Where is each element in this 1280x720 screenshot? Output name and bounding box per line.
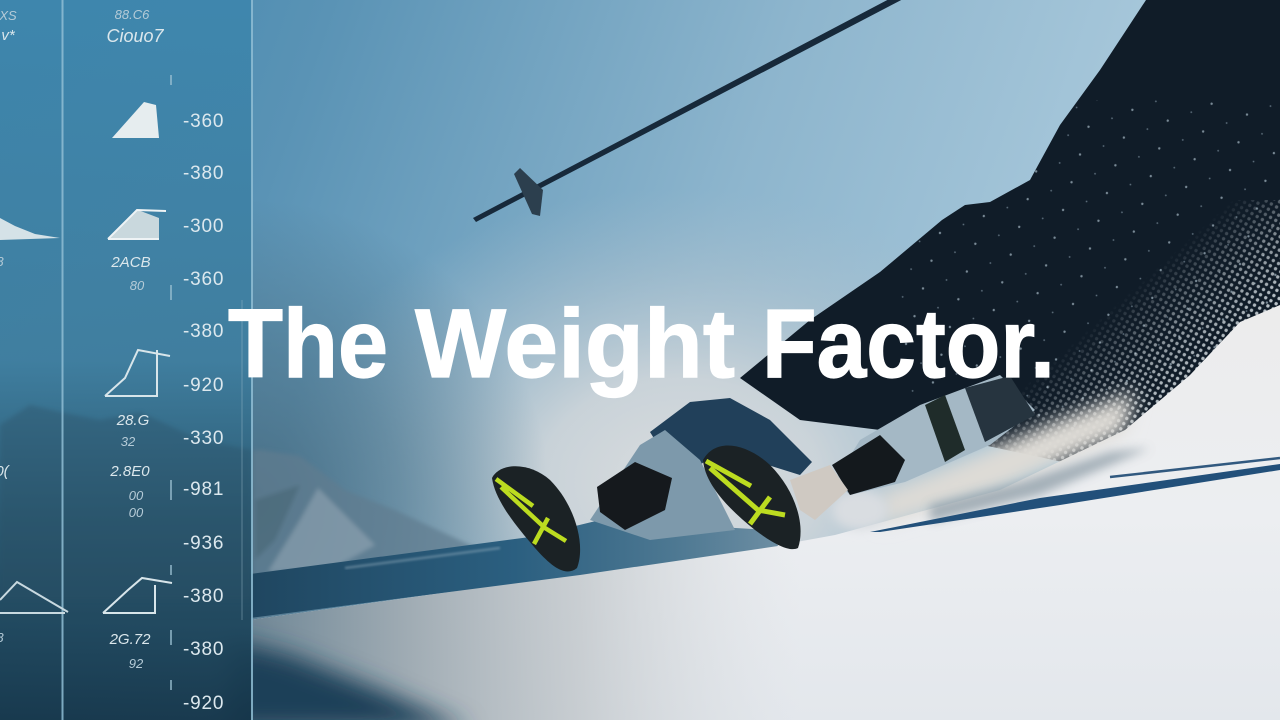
axis value labels: -330 (183, 428, 224, 449)
chart mini labels: 32 (121, 434, 136, 449)
mountains (0, 402, 520, 620)
title: Weight (415, 289, 735, 398)
ski trail lines (870, 458, 1280, 532)
chart mini labels: 2G.72 (109, 631, 151, 648)
leg: halftone snow spray (992, 200, 1280, 462)
chart mini labels: 80 (130, 278, 145, 293)
axis value labels: -360 (183, 111, 224, 132)
chart mini labels: 00 (129, 505, 144, 520)
boot snow patch (790, 465, 848, 520)
background: lower left haze (0, 200, 560, 620)
axis value labels: -300 (183, 216, 224, 237)
axis value labels: -920 (183, 375, 224, 396)
ski pole (473, 0, 907, 222)
left column heading fragment: v* (1, 27, 16, 44)
panel column lines (62, 0, 252, 720)
panel: left data overlay (0, 0, 252, 720)
leg: scattered snow flecks (900, 100, 1280, 430)
axis value labels: -380 (183, 163, 224, 184)
ski tip: left with yellow logo (492, 466, 580, 571)
axis value labels: -360 (183, 269, 224, 290)
axis value labels: -920 (183, 693, 224, 714)
rear boot (832, 375, 1035, 495)
axis value labels: -936 (183, 533, 224, 554)
chart mini labels: 00 (129, 488, 144, 503)
dark shadow at bottom left (230, 640, 470, 720)
chart icon: shaded wedge 2 (108, 210, 166, 239)
snow spray cloud (832, 392, 1150, 530)
background: valley fog (200, 150, 1100, 650)
chart mini labels: 28.G (116, 412, 150, 429)
skier leg (740, 0, 1280, 470)
chart mini labels: 2ACB (110, 254, 151, 271)
icon: pole basket (514, 168, 543, 216)
axis value labels: -380 (183, 639, 224, 660)
binding and front boot (590, 398, 812, 540)
panel mountain silhouette (0, 405, 252, 600)
title (228, 289, 1055, 398)
chart icon: solid wedge (112, 102, 159, 138)
chart icon: outlined wedge 3 (105, 350, 170, 396)
chart icon: left curve (0, 218, 60, 240)
ski: long shaft (250, 520, 778, 618)
axis value labels (183, 111, 224, 714)
chart mini labels: 92 (129, 656, 144, 671)
chart heading: 88.C6 (115, 7, 150, 22)
snow slope shading at left (250, 542, 800, 720)
chart icon: triangle outline (0, 582, 68, 613)
chart icon: outlined wedge 4 (103, 578, 172, 613)
title: Factor. (762, 289, 1055, 398)
snow slope foreground (250, 305, 1280, 720)
axis value labels: -380 (183, 321, 224, 342)
axis value labels: -380 (183, 586, 224, 607)
chart mini labels: 2.8E0 (109, 463, 150, 480)
chart heading: Ciouo7 (106, 26, 165, 46)
axis value labels: -981 (183, 479, 224, 500)
ski tip: right with yellow logo (703, 445, 801, 549)
title: The (228, 289, 388, 398)
chart heading (106, 7, 165, 46)
chart mini labels (0, 254, 151, 671)
